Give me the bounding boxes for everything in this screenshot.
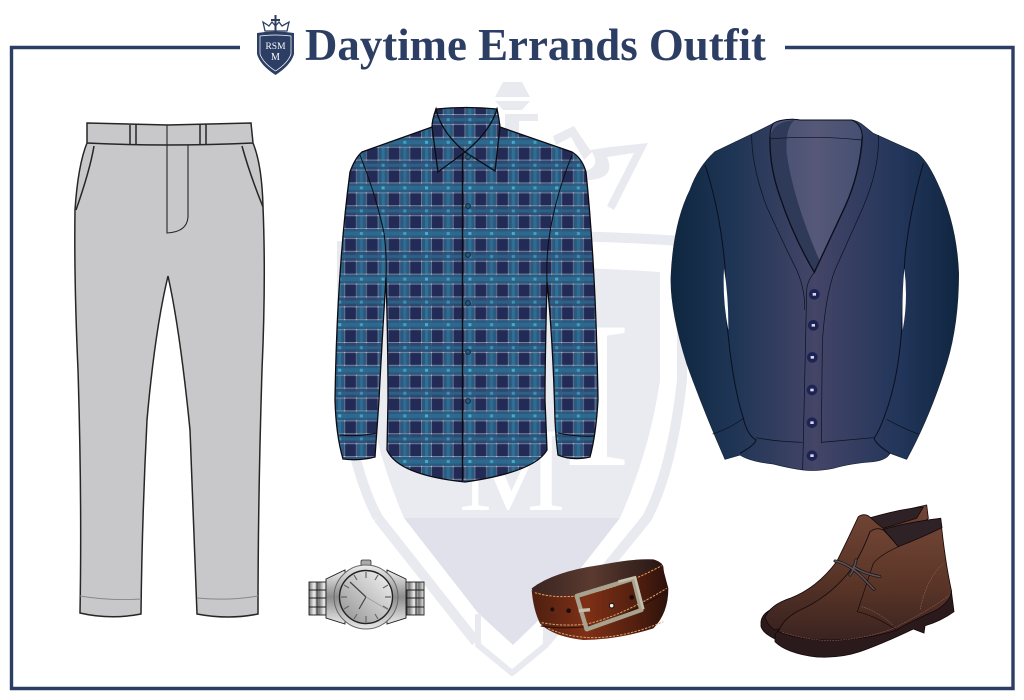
belt front strap — [532, 563, 668, 640]
watch markers and hands — [341, 572, 391, 622]
belt keeper — [618, 577, 643, 609]
boot laces — [835, 560, 880, 589]
watch dial — [340, 570, 392, 624]
logo shield — [257, 32, 294, 75]
watermark chevron — [478, 614, 546, 673]
belt stitching — [535, 566, 667, 638]
watermark letter I: I — [562, 279, 632, 511]
cardigan inner shirt — [770, 119, 862, 272]
belt buckle — [577, 579, 641, 629]
shirt collar — [432, 109, 500, 172]
back boot collar — [871, 507, 923, 528]
logo sword — [271, 15, 280, 32]
watermark shield panel — [365, 267, 660, 518]
watch bezel — [334, 565, 398, 629]
front boot sole — [775, 591, 954, 657]
cardigan ribbed band — [752, 135, 878, 470]
back boot sole — [761, 608, 817, 639]
boot seams — [857, 547, 898, 630]
cardigan sleeves — [705, 163, 923, 453]
belt loop edge — [541, 592, 667, 628]
shirt seams — [340, 155, 595, 436]
cardigan buttons — [807, 289, 820, 461]
trousers — [75, 123, 264, 617]
back boot upper — [765, 505, 928, 630]
shirt — [335, 108, 598, 482]
watermark lower fill — [404, 518, 620, 645]
armhole gaps — [724, 268, 906, 330]
front boot upper — [778, 518, 952, 640]
belt — [532, 559, 668, 640]
boots — [761, 505, 954, 657]
belt holes — [550, 595, 634, 613]
front boot collar — [883, 518, 942, 547]
belt back strap — [532, 559, 667, 613]
title: Daytime Errands Outfit — [305, 19, 767, 70]
watermark crown — [495, 82, 648, 210]
watermark letter M: M — [459, 403, 565, 536]
logo letters: RSM — [265, 42, 286, 52]
watch bracelet — [309, 570, 424, 624]
cardigan outline — [671, 119, 959, 471]
belt prong — [579, 610, 590, 611]
shirt buttons — [466, 155, 470, 403]
cardigan — [671, 119, 959, 471]
logo crown — [263, 22, 289, 31]
shirt body and sleeves — [335, 108, 598, 482]
watch — [309, 560, 424, 629]
watermark shield ring — [342, 236, 682, 642]
logo crest — [257, 15, 294, 75]
watermark: crest — [342, 82, 682, 673]
watch crown — [361, 560, 371, 566]
logo crest: M — [271, 52, 280, 63]
shirt placket — [462, 153, 464, 481]
cardigan inner shadow — [770, 120, 819, 272]
